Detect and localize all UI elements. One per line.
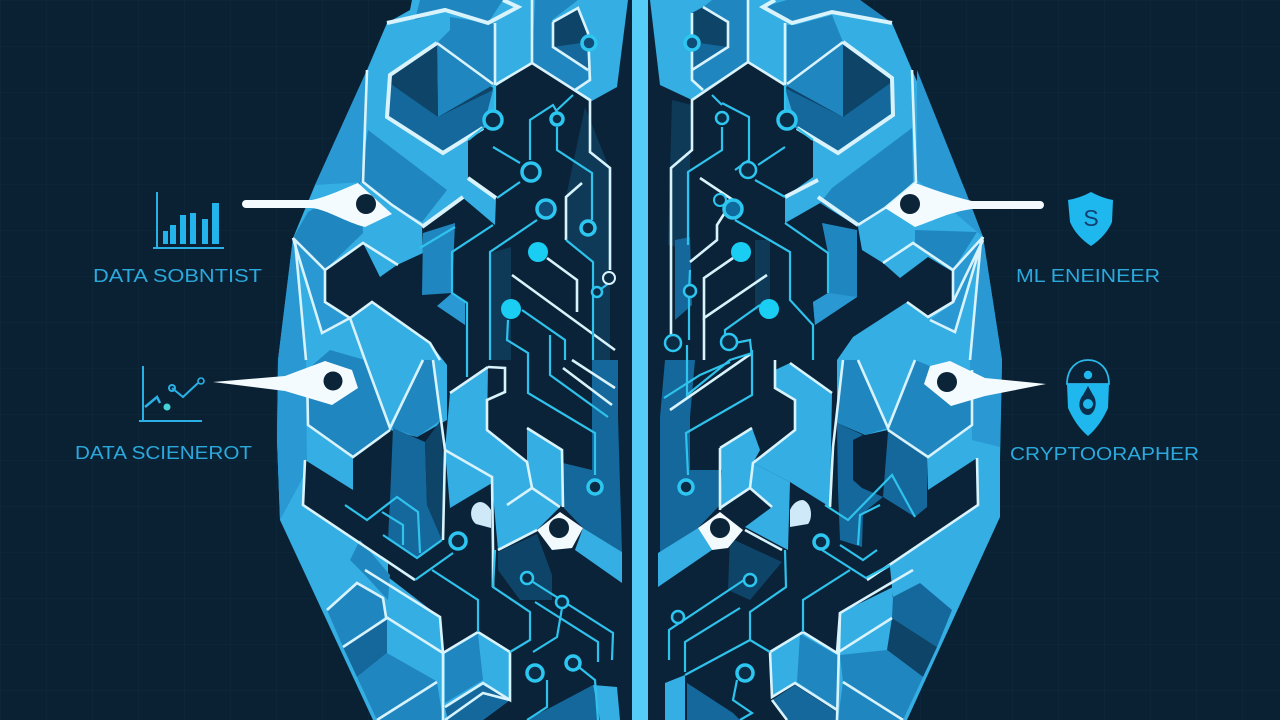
left facets <box>307 107 622 720</box>
centre divider bar <box>632 0 648 720</box>
brain illustration <box>213 0 1046 720</box>
pointer: top right <box>885 183 1044 227</box>
left lower eye <box>537 512 583 550</box>
role: data scientist (lower left) <box>75 366 252 463</box>
left dark circuit field <box>303 0 632 720</box>
role: cryptographer <box>1010 360 1199 464</box>
label: data scienerot: DATA SCIENEROT <box>75 443 252 463</box>
icon: lock mask <box>1067 360 1109 436</box>
right silhouette <box>648 0 1002 720</box>
role: data scientist (top left) <box>93 192 262 286</box>
label: data scientist: DATA SOBNTIST <box>93 266 262 286</box>
left hemisphere <box>277 0 632 720</box>
left cyan traces <box>345 85 613 720</box>
label: cryptographer: CRYPTOORAPHER <box>1010 444 1199 464</box>
right cyan traces <box>664 85 915 720</box>
icon: shield <box>1068 192 1113 246</box>
left small hexagon <box>553 8 588 70</box>
icon: bar chart <box>153 192 224 248</box>
left top hexagon <box>387 43 493 153</box>
right nodes <box>665 36 828 681</box>
right white outlines <box>670 0 983 720</box>
left nodes <box>450 36 615 681</box>
left pale blob <box>471 502 491 528</box>
pointer: lower right <box>924 361 1046 406</box>
left silhouette <box>277 0 632 720</box>
right small hexagon <box>692 7 728 70</box>
label: ml engineer: ML ENEINEER <box>1016 266 1160 286</box>
pointer: lower left <box>213 361 358 405</box>
role: ml engineer <box>1016 192 1160 286</box>
left white outlines <box>293 0 615 720</box>
right hemisphere <box>648 0 1002 720</box>
left outer facets <box>277 0 588 520</box>
icon: line chart <box>139 366 204 422</box>
right top hexagon <box>785 42 893 153</box>
right outer facets <box>692 0 1002 447</box>
right facets <box>658 100 972 720</box>
right lower eye <box>698 512 743 550</box>
pointer: top left <box>242 183 392 227</box>
icon: shield: S <box>1083 205 1099 231</box>
right dark circuit field <box>648 0 978 720</box>
right pale blob <box>790 500 811 527</box>
